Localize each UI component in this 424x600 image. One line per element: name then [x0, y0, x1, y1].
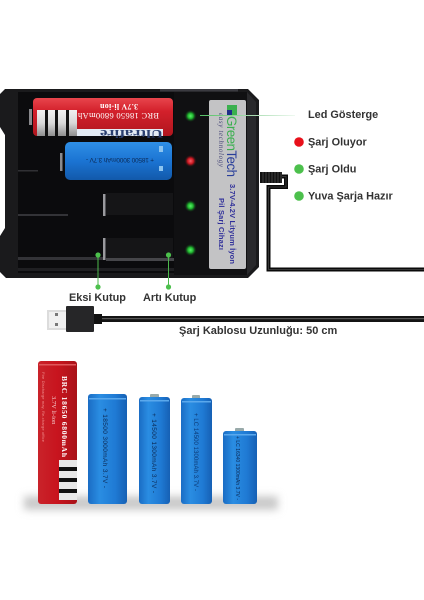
battery slots — [18, 109, 174, 271]
led callout line — [200, 115, 295, 116]
legend: charging: Şarj Oluyor — [308, 136, 367, 148]
callout: positive terminal: Artı Kutup — [143, 292, 197, 304]
battery shadow — [24, 496, 278, 510]
battery: red 18650: 3.7V li-ion — [50, 396, 57, 425]
red battery: 3.7V li-ion — [99, 102, 138, 111]
blue battery — [65, 142, 172, 180]
red battery: BRC 18650 6800mAh — [77, 111, 159, 121]
battery: blue lc 14500: + LC 14500 1300mAh 3.7V - — [192, 413, 198, 491]
logo icon — [227, 105, 237, 115]
charger body — [0, 89, 259, 278]
callout: negative terminal: Eksi Kutup — [69, 292, 126, 304]
charger label — [209, 100, 246, 269]
battery: red 18650 — [38, 361, 77, 504]
charger label: Pil Şarj Cihazı — [217, 198, 226, 250]
blue battery: + 18500 3000mAh 3.7V - — [86, 156, 154, 163]
callout: positive terminal — [143, 252, 197, 304]
battery: blue 14500 — [139, 394, 170, 504]
heading: led gosterge: Led Gösterge — [308, 109, 378, 121]
charger cable — [260, 172, 424, 270]
battery: blue lc 14500 — [181, 395, 212, 504]
legend: charged: Şarj Oldu — [308, 164, 356, 176]
charger label: easy technology — [217, 113, 225, 168]
battery: blue 16340 — [223, 428, 257, 504]
battery: red 18650: Fire Discharge may, Re-charge office — [41, 372, 46, 443]
legend: slot ready: Yuva Şarja Hazır — [308, 190, 394, 202]
charger label: 3.7V-4.2V Lityum İyon — [228, 184, 237, 264]
battery: blue 18500 — [88, 394, 127, 504]
battery: blue 18500: + 18500 3000mAh 3.7V - — [101, 408, 108, 488]
usb cable — [47, 306, 424, 332]
red battery: Ultrafire — [99, 127, 163, 141]
red battery — [33, 98, 173, 141]
led indicators — [184, 110, 196, 256]
cable length text: Şarj Kablosu Uzunluğu: 50 cm — [179, 325, 338, 337]
charger label: Green Tech — [224, 116, 239, 177]
callout: negative terminal — [69, 252, 126, 304]
battery: blue 16340: + LC 16340 1300mAh 3.7V - — [234, 436, 240, 500]
battery: red 18650: BRC 18650 6800mAh — [60, 376, 69, 458]
battery: blue 14500: + 14500 1300mAh 3.7V - — [150, 413, 157, 493]
